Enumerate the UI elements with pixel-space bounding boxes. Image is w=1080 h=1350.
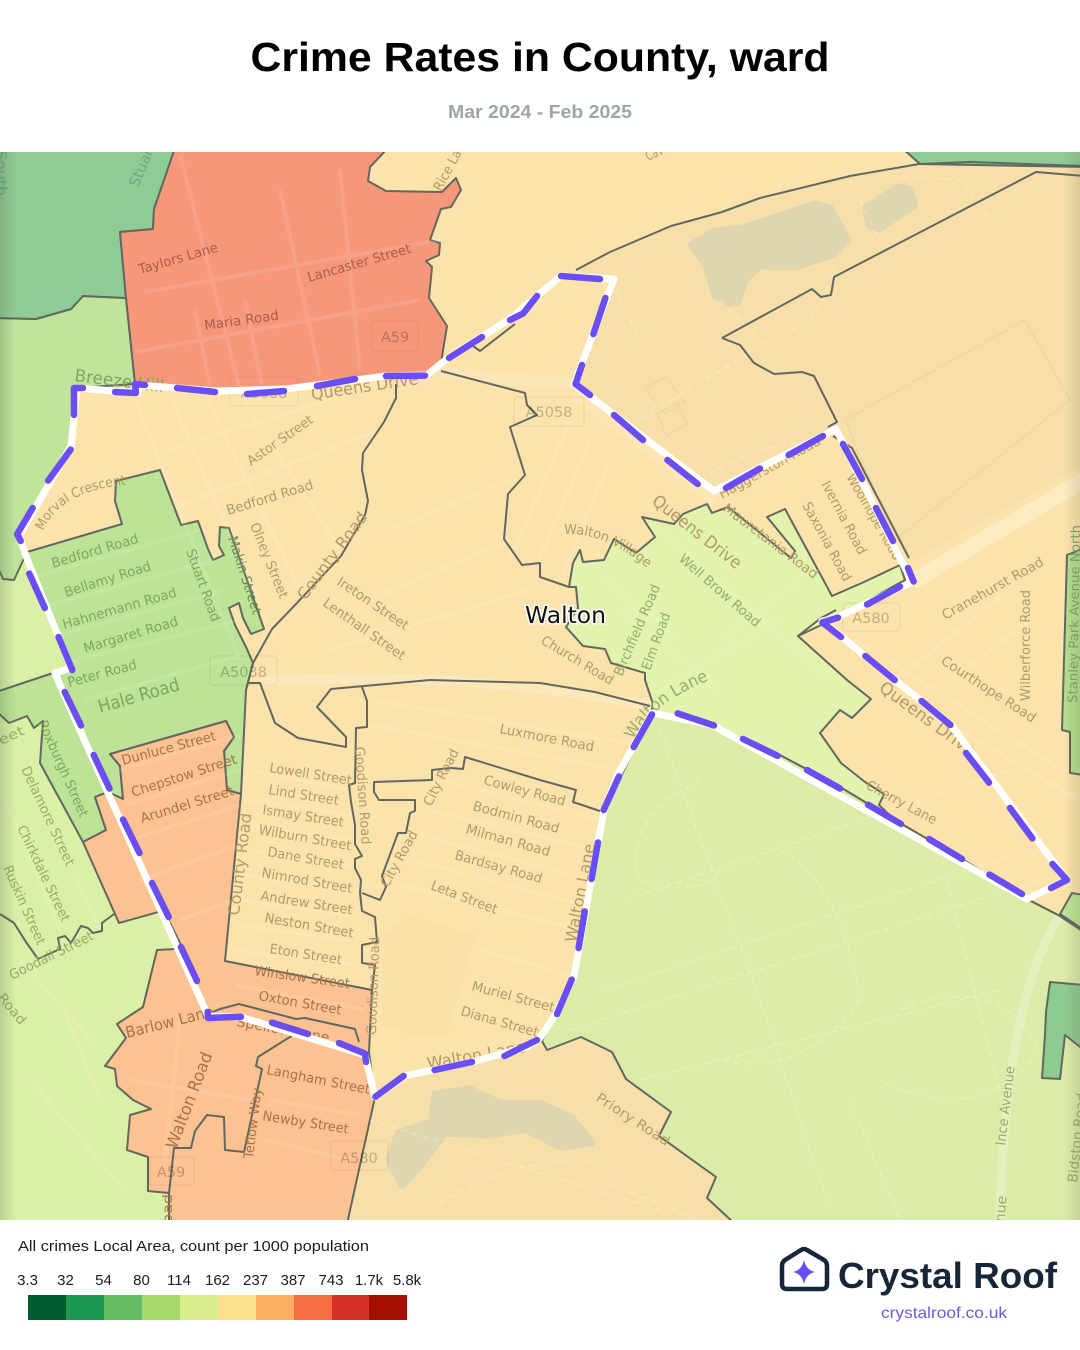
street labels: yellow zones: Queens Drive	[310, 369, 420, 405]
park area north east	[574, 162, 1080, 561]
title: Crime Rates in County, ward	[250, 34, 830, 80]
street labels: yellow zones: Ivernia Road	[817, 478, 870, 557]
street labels: yellow zones: Cowley Road	[482, 772, 567, 810]
street labels: pale green zones: Ince Avenue	[993, 1065, 1019, 1146]
street labels: yellow zones: County Road	[224, 812, 256, 916]
legend tick labels: 162	[205, 1272, 230, 1289]
street labels: yellow zones: Bodmin Road	[471, 798, 561, 837]
street labels: yellow zones: Wilberforce Road	[1018, 590, 1034, 701]
legend tick labels: 5.8k	[393, 1272, 422, 1289]
street labels: green zones: Stuart Road	[182, 547, 223, 624]
zone: orange	[83, 721, 375, 1224]
street labels: yellow zones	[22, 152, 1057, 1146]
legend tick labels	[17, 1272, 422, 1289]
street labels: yellow zones: City Road	[420, 746, 463, 809]
street labels: yellow zones: Wilburn Street	[257, 822, 353, 854]
street labels: yellow zones: Milman Road	[464, 821, 552, 860]
legend tick labels: 387	[280, 1272, 306, 1289]
street labels: yellow zones: Church Road	[538, 633, 616, 689]
street labels: yellow zones: Morval Crescent	[34, 476, 126, 530]
street labels: yellow zones: Walton Lane	[561, 842, 599, 944]
street labels: pale green zones: Goodall Street	[7, 928, 96, 984]
street labels: orange zone	[120, 728, 371, 1234]
street labels: pale green zones: Birchfield Road	[611, 582, 664, 679]
street labels: yellow zones: Cherry Lane	[863, 777, 940, 828]
street labels: yellow zones: Cranehurst Road	[939, 554, 1047, 623]
zone: north west dark green	[0, 148, 175, 319]
zone: lower left light green	[0, 560, 174, 1220]
street labels: yellow zones: Walton Village	[564, 524, 650, 567]
street labels: yellow zones: Ireton Street	[334, 574, 412, 634]
road shields	[149, 321, 900, 1185]
legend tick labels: 3.3	[17, 1272, 38, 1289]
street labels: yellow zones: Lowell Street	[268, 760, 353, 789]
street labels: orange zone: Newby Street	[261, 1108, 350, 1138]
street labels: green zones: Peter Road	[66, 657, 139, 691]
street labels: pale green zones: Ruskin Street	[0, 863, 49, 947]
logo: Crystal Roof	[782, 1249, 1058, 1322]
street labels: orange zone: Dunluce Street	[120, 728, 218, 769]
road shields: A5058	[241, 386, 287, 402]
street labels: yellow zones: Neston Street	[263, 910, 355, 942]
street labels: yellow zones: Olney Street	[246, 521, 291, 601]
school block	[382, 916, 475, 1038]
street labels: yellow zones: Muriel Street	[470, 978, 556, 1016]
street labels: pale green zones: Avenue	[990, 1195, 1011, 1248]
street labels: yellow zones: Queens Drive	[648, 491, 745, 573]
legend tick labels: 1.7k	[355, 1272, 384, 1289]
street labels: pale green zones	[0, 514, 1080, 1272]
street labels: green zones	[0, 140, 1080, 820]
street labels: red zone	[136, 240, 413, 334]
street labels: yellow zones: Queens Drive	[875, 678, 979, 761]
zone: north west light green	[0, 296, 135, 580]
street labels: yellow zones: Woolhope Road	[843, 471, 905, 563]
icon: house with star	[782, 1249, 827, 1289]
ward boundary: white casing	[19, 276, 1067, 1097]
legend tick labels: 743	[318, 1272, 344, 1289]
street labels: pale green zones: Well Brow Road	[675, 551, 764, 631]
street labels: yellow zones: Bedford Road	[224, 477, 315, 519]
pond south	[389, 1089, 592, 1185]
street labels: pale green zones: Chirkdale Street	[13, 823, 73, 924]
street labels: yellow zones: Leta Street	[429, 878, 500, 918]
legend colour scale	[28, 1295, 407, 1320]
street labels: yellow zones: Saxonia Road	[798, 499, 855, 584]
ward boundaries	[0, 162, 1080, 1193]
road shields: A59	[157, 1165, 185, 1181]
street labels: orange zone: Arundel Street	[138, 783, 236, 827]
street labels: orange zone: Barlow Lane	[124, 1003, 215, 1042]
subtitle: date range: Mar 2024 - Feb 2025	[448, 102, 632, 122]
road shields: A580	[340, 1151, 378, 1167]
street labels: yellow zones: Diana Street	[459, 1003, 540, 1041]
road shields: A5058	[526, 405, 572, 421]
street labels: yellow zones: Eton Street	[268, 941, 343, 968]
zone: mid green street block	[0, 470, 264, 842]
street labels: orange zone: Langham Street	[265, 1062, 371, 1098]
zone: light green central	[566, 504, 905, 820]
street labels: red zone: Maria Road	[203, 308, 280, 334]
street labels: orange zone: Road	[160, 1194, 176, 1234]
street labels: green zones: Makin Street	[224, 534, 264, 616]
street labels: yellow zones: Mauretania Road	[720, 500, 821, 582]
logo url: crystalroof.co.uk	[881, 1305, 1008, 1322]
legend tick labels: 54	[95, 1272, 112, 1289]
street labels: yellow zones: Haggerston Road	[716, 433, 824, 502]
zone: green corner east	[1060, 893, 1080, 930]
park area south	[348, 1037, 735, 1224]
zone: large park	[542, 713, 1080, 1224]
road shields: A580	[852, 611, 890, 627]
street labels: yellow zones: Walton Lane	[425, 1037, 527, 1073]
zone: red high crime	[120, 148, 461, 391]
street labels: green zones: Stuart	[125, 140, 160, 190]
pond north large	[691, 204, 848, 303]
place label: Walton: Walton	[525, 603, 606, 629]
street labels: yellow zones: Cavendish	[643, 129, 695, 165]
zone: dark green north east	[905, 152, 1080, 168]
street labels: yellow zones: Ismay Street	[261, 802, 345, 831]
street labels: yellow zones: Goodison Road	[351, 746, 374, 845]
pond north small	[866, 187, 915, 229]
legend	[17, 1238, 422, 1320]
zone: green strip east	[1062, 548, 1080, 775]
park footpaths	[370, 175, 1070, 1220]
street labels: yellow zones: Dane Street	[266, 844, 345, 873]
street labels: green zones: Bedford Road	[50, 531, 140, 572]
street labels: yellow zones: Lenthall Street	[320, 595, 408, 664]
street labels: green zones: Bellamy Road	[62, 558, 153, 601]
road shields: A5038	[220, 665, 267, 681]
street labels: orange zone: Chepstow Street	[129, 752, 239, 801]
map edge shading	[0, 152, 1080, 1220]
street labels: orange zone: Walton Road	[162, 1049, 216, 1151]
street labels: yellow zones: Astor Street	[244, 412, 316, 469]
legend tick labels: 32	[57, 1272, 74, 1289]
street labels: green zones: Hahnemann Road	[61, 585, 179, 633]
street labels: yellow zones: Rice Lane	[430, 133, 473, 194]
street labels: yellow zones: Goodison Road	[364, 937, 383, 1035]
street labels: pale green zones: Walton Lane	[623, 673, 708, 737]
street labels: yellow zones: Nimrod Street	[260, 865, 354, 897]
street labels: orange zone: Tetlow Way	[241, 1087, 266, 1160]
street labels: yellow zones: Andrew Street	[259, 888, 354, 918]
zone: dark green block south east	[1042, 982, 1080, 1079]
street labels: orange zone: Spellow Lane	[235, 1014, 331, 1046]
legend tick labels: 114	[167, 1272, 191, 1289]
street labels: orange zone: Winslow Street	[253, 963, 351, 992]
street labels: pale green zones: Delamore Street	[17, 764, 78, 869]
street labels: green zones: Margaret Road	[82, 614, 180, 657]
street labels: pale green zones: Elm Road	[639, 611, 674, 672]
street labels: red zone: Taylors Lane	[136, 240, 220, 278]
street labels: yellow zones: City Road	[378, 828, 422, 890]
street labels: red zone: Lancaster Street	[306, 241, 413, 286]
street labels: yellow zones: Priory Road	[593, 1090, 673, 1150]
street labels: yellow zones: Lind Street	[267, 782, 340, 809]
street labels: yellow zones: Courthope Road	[938, 653, 1039, 726]
street labels: yellow zones: Bardsay Road	[453, 847, 544, 887]
street labels: orange zone: Oxton Street	[257, 988, 343, 1019]
street labels: green zones: Hale Road	[96, 674, 182, 718]
ward boundary: purple dashes	[17, 276, 1067, 1097]
road shields: A59	[381, 330, 409, 346]
street labels: green zones: Roxburgh Street	[34, 718, 91, 820]
street labels: yellow zones: County Road	[293, 508, 371, 603]
street labels: green zones: Breeze Hill	[73, 366, 165, 397]
legend tick labels: 237	[243, 1272, 268, 1289]
logo wordmark: Crystal Roof	[838, 1255, 1058, 1296]
legend title: All crimes Local Area, count per 1000 population	[18, 1238, 369, 1255]
street network	[5, 155, 1080, 1220]
legend tick labels: 80	[133, 1272, 150, 1289]
street labels: yellow zones: Luxmore Road	[498, 721, 596, 755]
